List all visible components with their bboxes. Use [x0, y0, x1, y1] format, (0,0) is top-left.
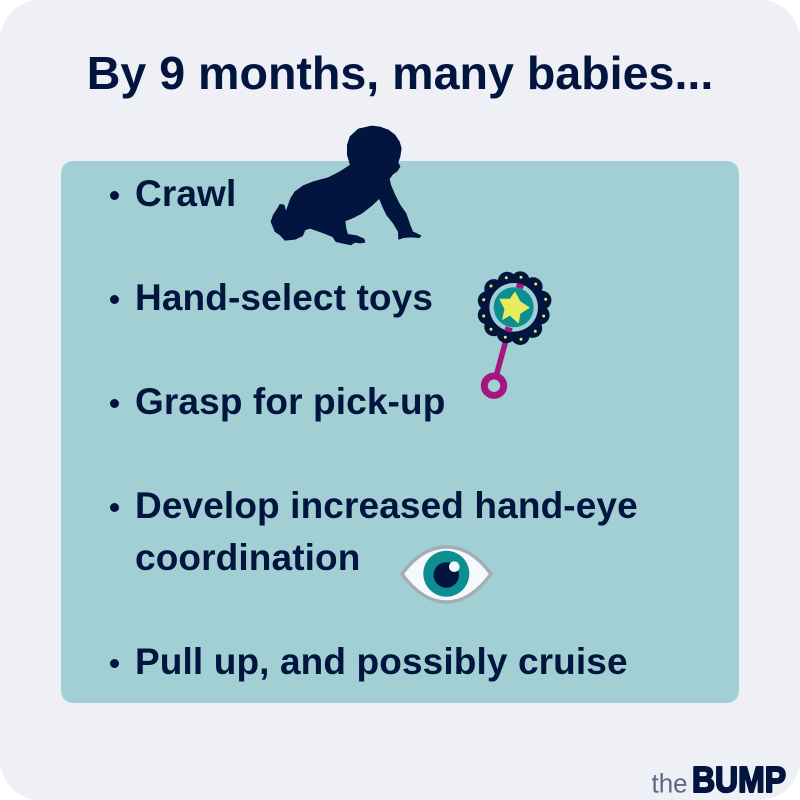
- logo: the: [652, 768, 688, 798]
- logo: BUMP: [692, 759, 786, 800]
- milestone: hand-select toys: Hand-select toys: [135, 277, 433, 318]
- milestone: crawl: Crawl: [135, 173, 236, 214]
- milestone: grasp: Grasp for pick-up: [135, 381, 445, 422]
- milestone: hand-eye coordination: [110, 485, 638, 578]
- milestone: hand-eye coordination: coordination: [135, 537, 360, 578]
- milestone: pull up: Pull up, and possibly cruise: [135, 641, 628, 682]
- milestone: hand-eye coordination: Develop increased hand-eye: [135, 485, 638, 526]
- title: By 9 months, many babies...: [87, 47, 713, 99]
- panel: milestones: [61, 161, 739, 703]
